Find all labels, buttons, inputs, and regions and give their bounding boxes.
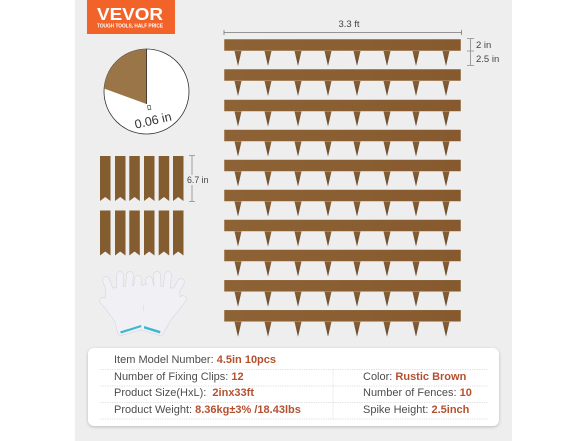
spec: number of fences: Number of Fences: 10 [363, 387, 472, 399]
logo: VEVOR: TOUGH TOOLS, HALF PRICE [97, 24, 164, 30]
background panel [75, 0, 512, 441]
row divider lines [100, 369, 488, 420]
pie cross-section diagram [104, 49, 189, 134]
label: 0.06 in: 0.06 in [133, 110, 173, 132]
specification table panel [88, 348, 499, 426]
clip strips, two rows [100, 156, 184, 256]
ten landscape edging fences [224, 39, 461, 337]
logo: VEVOR: VEVOR [97, 4, 163, 24]
spec: fixing clips: Number of Fixing Clips: 12 [114, 370, 244, 382]
spec: product size: Product Size(HxL): 2inx33ft [114, 387, 254, 399]
spec: spike height: Spike Height: 2.5inch [363, 404, 469, 416]
dimension: fence width 3.3 ft: 3.3 ft [338, 19, 360, 30]
spec: color: Color: Rustic Brown [363, 370, 466, 382]
dimension: clip length 6.7 in: 6.7 in [187, 175, 209, 185]
icon: pair of work gloves [103, 275, 183, 334]
dimension: clip length 6.7 in [187, 156, 209, 202]
spec: product weight: Product Weight: 8.36kg±3% /18.43lbs [114, 404, 301, 416]
spec: item model number: Item Model Number: 4.5in 10pcs [114, 354, 276, 366]
logo: VEVOR [87, 0, 175, 34]
dimension: fence width 3.3 ft [224, 19, 462, 35]
dimension: height 2 in and 2.5 in: 2 in [476, 40, 491, 51]
dimension: height 2 in and 2.5 in [467, 38, 499, 66]
dimension: height 2 in and 2.5 in: 2.5 in [476, 54, 499, 65]
